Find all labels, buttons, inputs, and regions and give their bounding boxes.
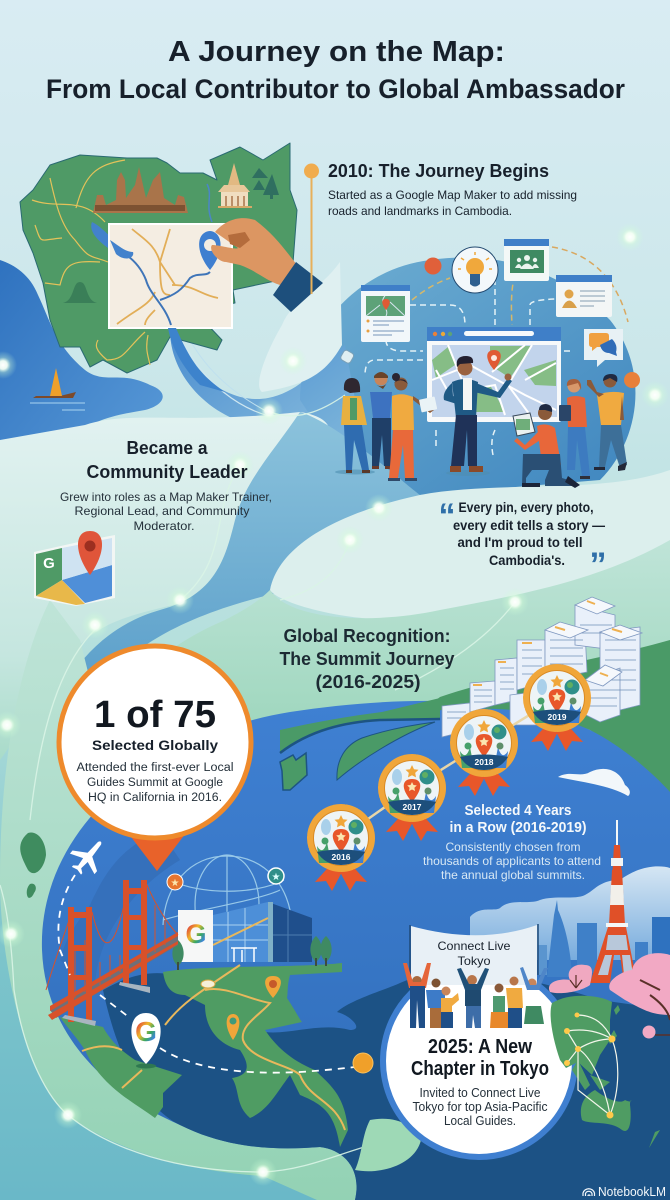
- Golden Gate bridge: [46, 880, 178, 1026]
- callout: 1 of 75: Selected Globally: [92, 737, 218, 753]
- quote: ”: [590, 546, 606, 584]
- heading: global recognition: The Summit Journey: [280, 649, 454, 669]
- medal 2017: [380, 756, 444, 841]
- text: 2010: roads and landmarks in Cambodia.: [328, 204, 512, 218]
- medal 2019: [525, 666, 589, 751]
- lower-left land: [60, 1017, 182, 1118]
- northern land: [280, 640, 670, 792]
- text: community leader: Grew into roles as a Map Maker Trainer,: [60, 490, 272, 504]
- country shape: [20, 143, 297, 373]
- text: 2010: Started as a Google Map Maker to add missing: [328, 188, 577, 202]
- left mint swoosh: [0, 600, 420, 1200]
- text: community leader: Community Leader: [86, 462, 248, 482]
- Tokyo Tower: [590, 820, 637, 983]
- text: 2010: 2010: The Journey Begins: [328, 161, 549, 181]
- icon: orange pins: [201, 976, 373, 1073]
- mint blob under: [355, 1119, 421, 1171]
- banner: Tokyo: [458, 954, 491, 968]
- medal 2016: [309, 806, 373, 891]
- text: selected 4 years: thousands of applicants to attend: [423, 854, 601, 868]
- left green islands: [20, 833, 46, 898]
- pin and hand: [199, 218, 323, 312]
- description: Local Guides.: [444, 1114, 516, 1128]
- callout: 1 of 75: [59, 646, 251, 871]
- left sea: [0, 260, 163, 470]
- NotebookLM mark: NotebookLM: [598, 1185, 666, 1199]
- bulb: [452, 247, 498, 293]
- description: [412, 1086, 548, 1128]
- left pale panel: [0, 412, 330, 760]
- icon: globe stars: ★: [272, 872, 281, 883]
- connector path between medals: [341, 698, 557, 838]
- person: presenter: [444, 356, 512, 476]
- boat: [30, 368, 85, 410]
- icon: Google map pin: [131, 1013, 161, 1068]
- text: community leader: [60, 438, 272, 533]
- crowd: [403, 963, 548, 1028]
- wireframe globe: [163, 855, 292, 960]
- quote: Cambodia's.: [489, 553, 565, 568]
- collaboration connectors: [365, 247, 628, 455]
- panel: 2025 Tokyo: [355, 924, 575, 1171]
- text: 2010: [328, 161, 577, 218]
- navy sea: [103, 973, 670, 1200]
- person: red shirt: [559, 379, 590, 479]
- callout: 1 of 75: Attended the first-ever Local: [76, 762, 234, 774]
- peninsula: [337, 722, 435, 780]
- heading: global recognition: Global Recognition:: [284, 626, 450, 646]
- lake: [91, 222, 130, 256]
- medal 2016: 2016: [332, 852, 351, 862]
- river ribbon: [170, 330, 370, 480]
- Cambodia map: [20, 143, 297, 373]
- person: orange pants: [388, 373, 437, 481]
- hand: [211, 218, 297, 285]
- paper map: [109, 224, 232, 328]
- right pale panel: [270, 470, 670, 620]
- icon: globe stars: [167, 868, 284, 890]
- headline: [411, 1036, 549, 1080]
- description: Invited to Connect Live: [420, 1086, 541, 1100]
- temple: stupa: [218, 163, 252, 208]
- card: profile: [556, 275, 612, 317]
- globe ocean: [42, 701, 670, 1200]
- blue pin: [199, 231, 221, 270]
- building: Google HQ: [172, 902, 332, 970]
- banner: Connect Live: [438, 939, 511, 953]
- callout: 1 of 75: 1 of 75: [94, 694, 216, 736]
- description: Tokyo for top Asia-Pacific: [412, 1100, 548, 1114]
- medal 2018: 2018: [475, 757, 494, 767]
- central land with route: [82, 963, 348, 1147]
- mountain: [63, 282, 97, 303]
- circle: [383, 965, 575, 1157]
- person: yellow shirt: [587, 374, 627, 471]
- islands: [280, 753, 307, 790]
- dice icon: [340, 349, 355, 364]
- people backdrop blob: [300, 258, 635, 495]
- small badge right: [624, 372, 640, 388]
- medal 2018: [452, 711, 516, 796]
- thin journey lines: [0, 395, 515, 1172]
- globe inner ring: [60, 830, 180, 990]
- person: yellow jacket: [335, 378, 375, 474]
- lake on paper: [110, 240, 133, 258]
- Tokyo skyline clouds: [470, 866, 670, 960]
- timeline marker: [304, 164, 319, 294]
- dashed flight path: [58, 875, 355, 1073]
- camera badge: [424, 258, 442, 274]
- callout: 1 of 75: HQ in California in 2016.: [88, 792, 222, 804]
- text: selected 4 years: the annual global summits.: [441, 868, 585, 882]
- medal 2019: 2019: [548, 712, 567, 722]
- building: Google HQ: G: [185, 919, 207, 949]
- tributary: [207, 184, 212, 222]
- text: selected 4 years: Selected 4 Years: [464, 803, 572, 819]
- people group: [335, 356, 627, 488]
- text: selected 4 years: in a Row (2016-2019): [450, 820, 587, 836]
- chat: [584, 329, 623, 367]
- text: selected 4 years: Consistently chosen from: [446, 840, 580, 854]
- heading: global recognition: [280, 626, 454, 692]
- browser map: [427, 327, 561, 422]
- cloud: [558, 769, 630, 796]
- mint band: [70, 540, 670, 800]
- banner: [410, 924, 538, 985]
- quote: and I'm proud to tell: [458, 535, 582, 550]
- quote: every edit tells a story —: [453, 518, 605, 533]
- middle blue ribbon: [25, 412, 420, 850]
- app cards: [340, 239, 640, 388]
- card: community: [504, 239, 549, 281]
- person: kneeling: [513, 404, 580, 488]
- text: community leader: Regional Lead, and Community: [74, 504, 250, 518]
- callout: 1 of 75: Guides Summit at Google: [87, 777, 223, 789]
- icon: airplane: [64, 831, 113, 881]
- icon: Google Maps tile: [34, 531, 115, 606]
- icon: globe stars: ★: [171, 878, 180, 889]
- cuff: [273, 262, 323, 312]
- sakura trees: [549, 953, 670, 1038]
- text: community leader: Moderator.: [134, 519, 194, 533]
- title: From Local Contributor to Global Ambassador: [46, 74, 625, 104]
- temple: Angkor: [93, 167, 188, 213]
- heading: global recognition: (2016-2025): [316, 672, 420, 692]
- text: selected 4 years: [423, 803, 601, 882]
- headline: 2025: A New: [428, 1036, 532, 1058]
- title: A Journey on the Map:: [168, 36, 505, 68]
- pale upper blob near timeline: [259, 262, 342, 392]
- country roads: [32, 160, 150, 365]
- card: map: [361, 285, 410, 342]
- quote: [438, 497, 606, 584]
- document stacks: [442, 597, 642, 737]
- headline: Chapter in Tokyo: [411, 1058, 549, 1080]
- quote: Every pin, every photo,: [458, 500, 594, 515]
- Asia-Pacific map: [551, 996, 660, 1148]
- quote: “: [438, 497, 456, 535]
- river ribbon top: [168, 328, 225, 392]
- trees: [252, 168, 279, 199]
- text: community leader: Became a: [126, 438, 208, 458]
- upper strip: [280, 698, 440, 753]
- icon: Google Maps tile: G: [43, 555, 55, 572]
- right land: [420, 640, 670, 792]
- icon: Google map pin: G: [135, 1016, 157, 1047]
- skyline: [538, 900, 670, 977]
- title: [46, 36, 625, 104]
- person: blue shirt: [370, 372, 392, 469]
- medal 2017: 2017: [403, 802, 422, 812]
